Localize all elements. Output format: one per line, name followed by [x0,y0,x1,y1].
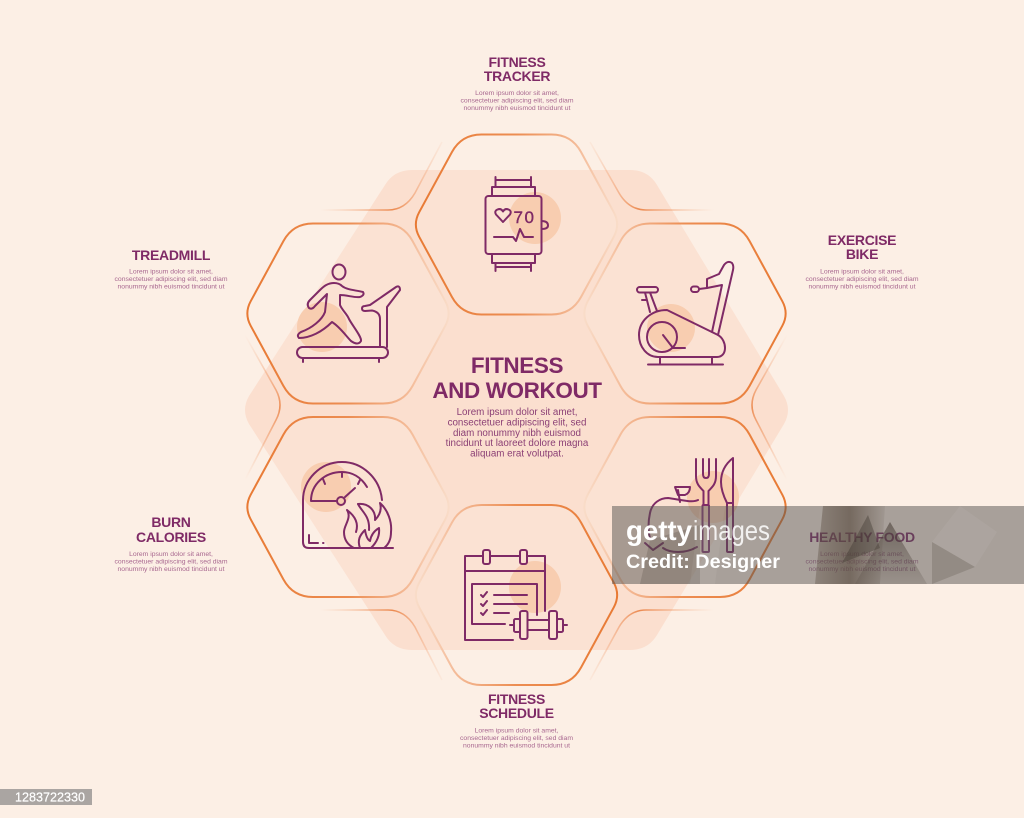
label: exercise bike: consectetuer adipiscing elit, sed diam [806,276,919,283]
label: exercise bike [806,232,919,290]
image id tag: 1283722330 [15,790,85,804]
label: exercise bike: BIKE [846,246,878,262]
label: treadmill: nonummy nibh euismod tincidunt ut [118,284,225,290]
icon: fitness schedule calendar and dumbbell [465,550,567,640]
hexagon: fitness schedule [416,505,617,685]
center title and description [432,353,602,460]
watermark band: Credit: Designer [626,552,781,573]
label: fitness schedule [460,691,573,750]
label: fitness tracker: FITNESS [488,54,546,70]
partial hexagon outlines between segments [245,142,787,680]
label: fitness tracker: TRACKER [484,68,550,84]
center title and description: aliquam erat volutpat. [470,448,564,460]
label: exercise bike: Lorem ipsum dolor sit amet, [820,268,904,276]
watermark band: images [693,515,770,546]
label: exercise bike: nonummy nibh euismod tincidunt ut [809,284,916,290]
label: fitness schedule: SCHEDULE [479,705,554,721]
label: fitness tracker: Lorem ipsum dolor sit amet, [475,90,559,97]
watermark band: getty [626,515,692,546]
image id tag [0,789,92,805]
label: burn calories: CALORIES [136,529,206,545]
icon: exercise bike [637,262,733,364]
label: burn calories: BURN [151,514,191,530]
label: treadmill: Lorem ipsum dolor sit amet, [129,268,213,276]
center title and description: FITNESS [471,353,563,378]
label: burn calories: Lorem ipsum dolor sit amet, [129,551,213,558]
label: burn calories [115,514,228,573]
label: treadmill: TREADMILL [132,247,211,263]
watermark band [612,506,1024,584]
center title and description: consectetuer adipiscing elit, sed [448,418,586,428]
label: fitness tracker [461,54,574,112]
center title and description: AND WORKOUT [432,378,602,403]
hexagon: burn calories [247,417,449,597]
label: treadmill: consectetuer adipiscing elit, sed diam [115,276,228,283]
label: healthy food: consectetuer adipiscing elit, sed diam [806,558,919,566]
label: exercise bike: EXERCISE [828,232,896,248]
icon: smartwatch: 70 [514,208,535,227]
label: fitness schedule: Lorem ipsum dolor sit amet, [475,728,559,734]
hexagon: exercise bike [584,224,786,404]
label: burn calories: nonummy nibh euismod tincidunt ut [118,566,225,573]
label: healthy food: HEALTHY FOOD [809,529,915,545]
hexagon: treadmill [247,224,449,404]
center title and description: tincidunt ut laoreet dolore magna [446,438,589,449]
label: healthy food [806,529,919,573]
icon: burn calories gauge with flames [301,462,393,548]
label: fitness schedule: nonummy nibh euismod tincidunt ut [463,742,570,750]
label: fitness tracker: nonummy nibh euismod tincidunt ut [464,105,571,112]
label: fitness schedule: consectetuer adipiscing elit, sed diam [460,735,573,742]
label: treadmill [115,247,228,290]
label: fitness schedule: FITNESS [488,691,545,707]
central large hexagon backdrop [245,170,788,650]
center title and description: Lorem ipsum dolor sit amet, [457,407,577,418]
icon: smartwatch [486,177,561,271]
icon: healthy food fork knife apple [645,458,739,552]
label: healthy food: Lorem ipsum dolor sit amet, [820,551,904,558]
label: healthy food: nonummy nibh euismod tincidunt ut [809,566,916,573]
hexagon: fitness tracker [416,134,617,314]
label: fitness tracker: consectetuer adipiscing elit, sed diam [461,98,574,104]
hexagon: healthy food [584,417,786,597]
label: burn calories: consectetuer adipiscing elit, sed diam [115,558,228,566]
icon: treadmill runner [297,264,400,362]
center title and description: diam nonummy nibh euismod [453,428,581,439]
